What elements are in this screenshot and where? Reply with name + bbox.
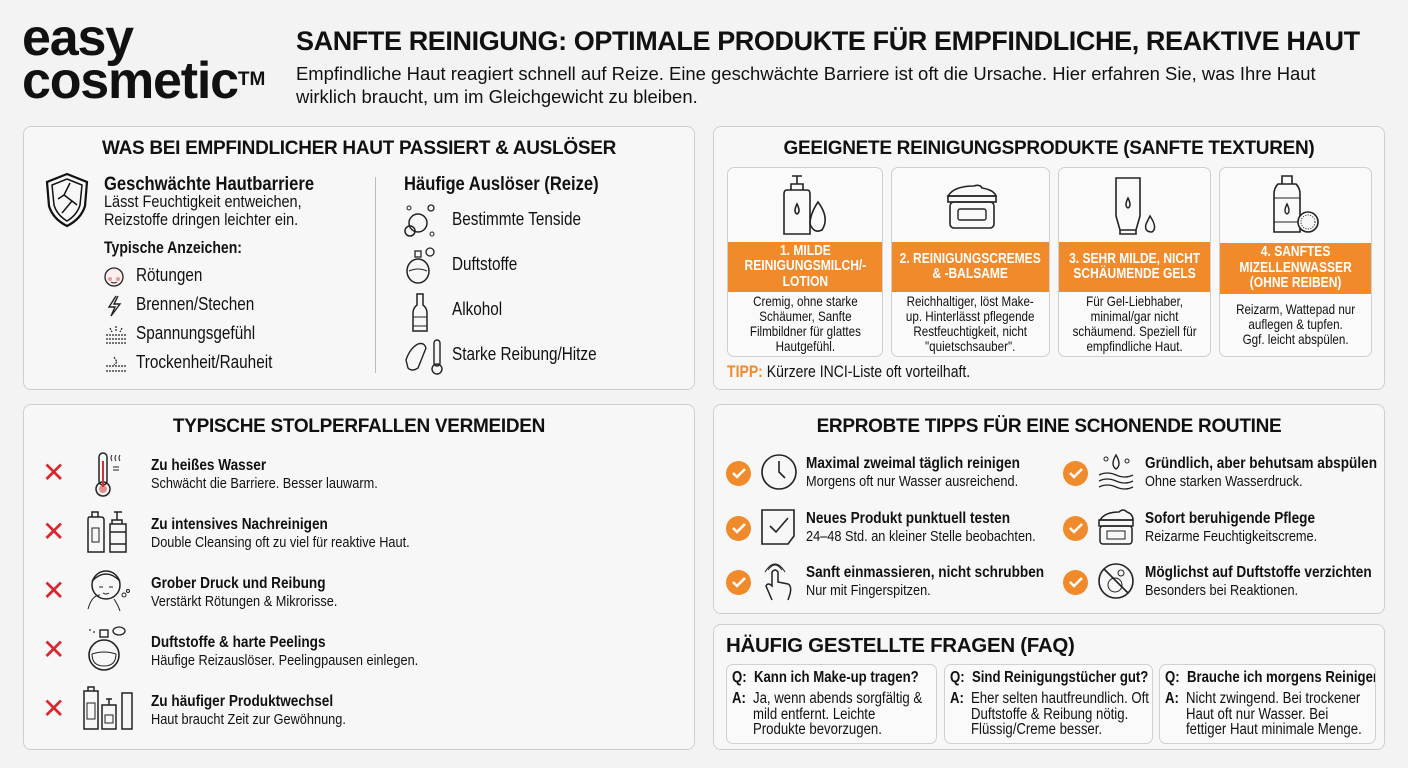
card 2: Restfeuchtigkeit, nicht (914, 323, 1027, 339)
faq 3 (1159, 664, 1376, 744)
card 1: Hautgefühl. (775, 338, 835, 354)
item 1: Schwächt die Barriere. Besser lauwarm. (151, 475, 378, 492)
panel: stolperfallen (23, 404, 695, 750)
item 4: ✕ (42, 633, 65, 666)
list: signs: Rötungen (136, 265, 202, 285)
card 3: SCHÄUMENDE GELS (1073, 266, 1196, 282)
card 3: 3. SEHR MILDE, NICHT (1069, 250, 1200, 266)
subtitle (296, 63, 1316, 107)
tip 4: Ohne starken Wasserdruck. (1145, 473, 1303, 490)
card 3: empfindliche Haut. (1086, 338, 1183, 354)
item 3: ✕ (42, 574, 65, 607)
item 1: Zu heißes Wasser (151, 457, 266, 474)
item 3: Grober Druck und Reibung (151, 575, 326, 592)
card 1: Filmbildner für glattes (749, 323, 861, 339)
tip 2 (726, 509, 1036, 545)
panel: was passiert (23, 126, 695, 390)
list: triggers: Duftstoffe (452, 254, 517, 274)
item 1: ✕ (42, 456, 65, 489)
item 5 (42, 686, 346, 730)
icon: shield (46, 172, 88, 228)
tip 3: Nur mit Fingerspitzen. (806, 582, 931, 599)
item 3: Verstärkt Rötungen & Mikrorisse. (151, 593, 337, 610)
faq 3: Nicht zwingend. Bei trockener (1186, 690, 1360, 707)
heading: ERPROBTE TIPPS FÜR EINE SCHONENDE ROUTINE (817, 416, 1281, 437)
list: triggers (404, 204, 597, 375)
card 1: LOTION (782, 274, 828, 290)
item 4 (42, 626, 418, 671)
tip 4: Gründlich, aber behutsam abspülen (1145, 455, 1377, 472)
item 2: Double Cleansing oft zu viel für reaktive Haut. (151, 534, 410, 551)
card 4: MIZELLENWASSER (1239, 260, 1352, 276)
logo: cosmeticTM (22, 52, 265, 110)
tip 3: Sanft einmassieren, nicht schrubben (806, 564, 1044, 581)
list: signs: Spannungsgefühl (136, 323, 255, 343)
card 2: & -BALSAME (933, 266, 1008, 282)
logo (22, 9, 265, 110)
tip 6: Besonders bei Reaktionen. (1145, 582, 1298, 599)
tip 2: Neues Produkt punktuell testen (806, 510, 1010, 527)
tip: TIPP: Kürzere INCI-Liste oft vorteilhaft. (727, 363, 970, 381)
faq 2: Q: Sind Reinigungstücher gut? (950, 669, 1148, 686)
item 5: ✕ (42, 692, 65, 725)
tip 1: Maximal zweimal täglich reinigen (806, 455, 1020, 472)
item 2: Zu intensives Nachreinigen (151, 516, 328, 533)
panel: was passiert: Lässt Feuchtigkeit entweichen, (104, 192, 302, 211)
panel: was passiert: Typische Anzeichen: (104, 239, 242, 257)
text: barrier: Geschwächte Hautbarriere (104, 173, 314, 195)
panel: was passiert: Reizstoffe dringen leichter ein. (104, 210, 298, 229)
panel: reinigungsprodukte (713, 126, 1385, 390)
text: triggers heading: Häufige Auslöser (Reize) (404, 173, 599, 195)
card 3: minimal/gar nicht (1091, 308, 1178, 324)
heading: WAS BEI EMPFINDLICHER HAUT PASSIERT & AUSLÖSER (102, 138, 616, 159)
faq 1: A: (732, 690, 746, 707)
tip 5: Sofort beruhigende Pflege (1145, 510, 1315, 527)
card 4: 4. SANFTES (1261, 244, 1330, 260)
card 2: Reichhaltiger, löst Make- (907, 293, 1034, 309)
heading: GEEIGNETE REINIGUNGSPRODUKTE (SANFTE TEXTUREN) (784, 138, 1314, 159)
heading: HÄUFIG GESTELLTE FRAGEN (FAQ) (726, 634, 1075, 657)
tip 5 (1063, 509, 1317, 545)
list: triggers: Starke Reibung/Hitze (452, 344, 597, 364)
item 3 (42, 570, 337, 612)
faq 2: A: (950, 690, 964, 707)
tip 1: Morgens oft nur Wasser ausreichend. (806, 473, 1018, 490)
faq 1: mild entfernt. Leichte (753, 706, 875, 722)
faq 2: Eher selten hautfreundlich. Oft (971, 690, 1149, 707)
list: signs (104, 265, 272, 372)
divider (375, 177, 376, 373)
card 1: Cremig, ohne starke (753, 293, 857, 309)
card 4 (1219, 167, 1372, 357)
item 5: Zu häufiger Produktwechsel (151, 693, 333, 710)
card 3: schäumend. Speziell für (1072, 323, 1197, 339)
panel: tipps (713, 404, 1385, 614)
panel: faq (713, 624, 1385, 750)
faq 2: Duftstoffe & Reibung nötig. (971, 706, 1128, 722)
item 2 (42, 511, 410, 553)
card 4: Ggf. leicht abspülen. (1243, 331, 1348, 347)
list: signs: Trockenheit/Rauheit (136, 352, 272, 372)
item 2: ✕ (42, 515, 65, 548)
faq 1: Ja, wenn abends sorgfältig & (753, 690, 922, 707)
list: triggers: Alkohol (452, 299, 502, 319)
logo: easy (22, 9, 133, 67)
card 3 (1058, 167, 1211, 357)
faq 1 (726, 664, 937, 744)
card 2: "quietschsauber". (925, 338, 1016, 354)
faq 3: A: (1165, 690, 1179, 707)
card 4: Reizarm, Wattepad nur (1236, 301, 1355, 317)
card 1: 1. MILDE (780, 243, 830, 259)
item 4: Duftstoffe & harte Peelings (151, 634, 326, 651)
faq 2 (944, 664, 1153, 744)
card 2 (891, 167, 1050, 357)
card 2: 2. REINIGUNGSCREMES (900, 250, 1041, 266)
subtitle: wirklich braucht, um im Gleichgewicht zu bleiben. (296, 86, 698, 107)
card 3: Für Gel-Liebhaber, (1086, 293, 1183, 309)
list: signs: Brennen/Stechen (136, 294, 254, 314)
card 1: REINIGUNGSMILCH/- (744, 258, 866, 274)
faq 2: Flüssig/Creme besser. (971, 721, 1102, 738)
faq 1: Q: Kann ich Make-up tragen? (732, 669, 919, 686)
tip 6 (1063, 563, 1372, 599)
subtitle: Empfindliche Haut reagiert schnell auf Reize. Eine geschwächte Barriere ist oft die Ursache. Hier erfahren Sie, was Ihre Haut (296, 63, 1316, 84)
list: triggers: Bestimmte Tenside (452, 209, 581, 229)
faq 1: Produkte bevorzugen. (753, 721, 882, 738)
card 1: Schäumer, Sanfte (759, 308, 851, 324)
heading: TYPISCHE STOLPERFALLEN VERMEIDEN (173, 416, 545, 437)
faq 3: Haut oft nur Wasser. Bei (1186, 706, 1328, 722)
item 5: Haut braucht Zeit zur Gewöhnung. (151, 711, 346, 728)
tip 4 (1063, 454, 1377, 490)
card 4: (OHNE REIBEN) (1250, 275, 1341, 291)
tip 3 (726, 564, 1044, 600)
item 1 (42, 452, 378, 497)
item 4: Häufige Reizauslöser. Peelingpausen einlegen. (151, 652, 418, 669)
tip 6: Möglichst auf Duftstoffe verzichten (1145, 564, 1372, 581)
title: SANFTE REINIGUNG: OPTIMALE PRODUKTE FÜR EMPFINDLICHE, REAKTIVE HAUT (296, 26, 1360, 56)
tip 1 (726, 454, 1020, 490)
tip 2: 24–48 Std. an kleiner Stelle beobachten. (806, 528, 1036, 545)
card 2: up. Hinterlässt pflegende (906, 308, 1035, 324)
card 1 (727, 167, 883, 357)
faq 3: fettiger Haut minimale Menge. (1186, 721, 1362, 738)
tip 5: Reizarme Feuchtigkeitscreme. (1145, 528, 1317, 545)
card 4: auflegen & tupfen. (1248, 316, 1343, 332)
